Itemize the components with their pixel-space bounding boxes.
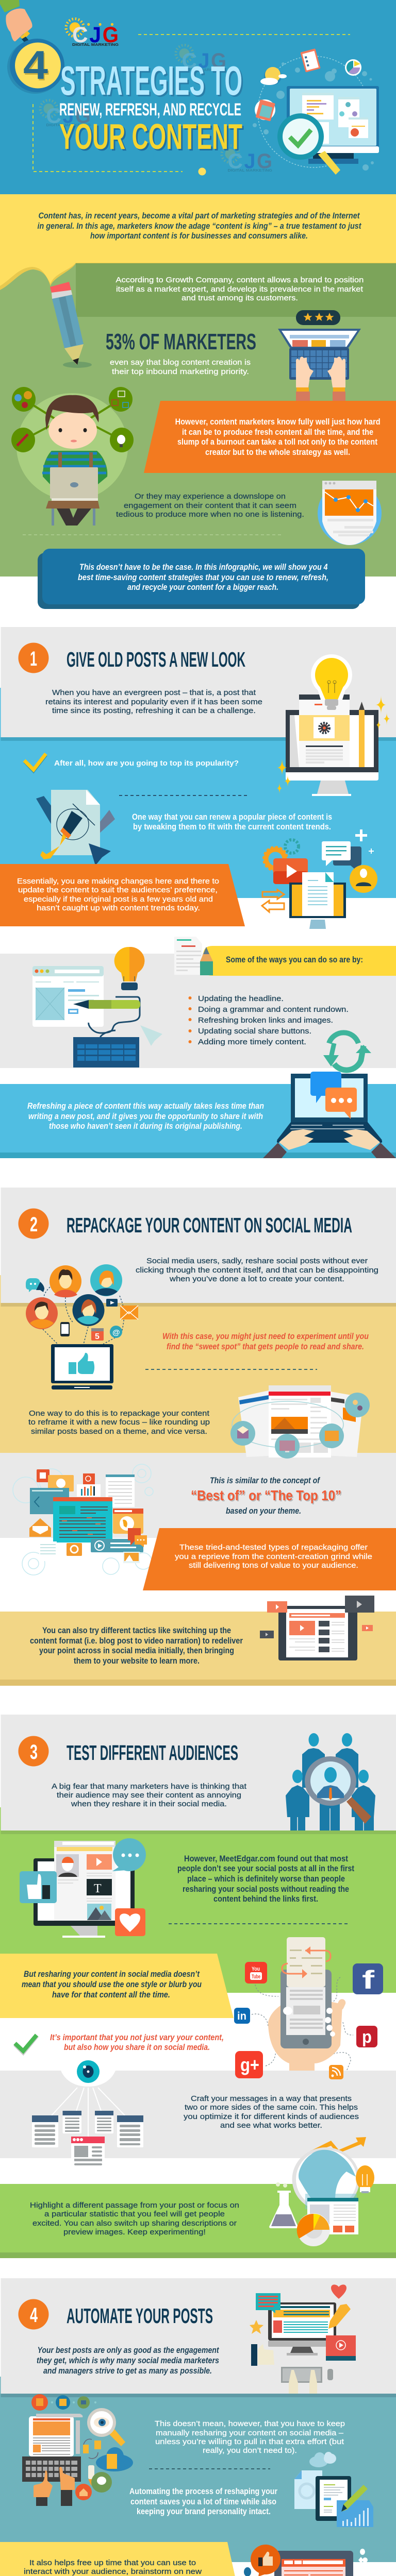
text block: manual resharing: [155, 2420, 345, 2455]
text block: intro paragraph: [37, 211, 362, 241]
text block: social media users: Social media users, sadly, reshare social posts without ever: [146, 1257, 368, 1265]
text block: highlight a passage: preview images. Keep experimenting!: [63, 2228, 206, 2236]
text block: engagement: [37, 2345, 220, 2376]
callout: this doesn't have to be the case: best time-saving content strategies that you can use to renew, refresh,: [78, 572, 328, 582]
callout: orange repackaging: still delivering tons of value to your audience.: [189, 1562, 358, 1570]
watermark: logo 2: J: [63, 104, 74, 128]
text block: social media users: clicking through the content itself, and that can be disappointing: [136, 1266, 378, 1275]
text block: best of: This is similar to the concept of: [210, 1476, 321, 1485]
text block: meetedgar: content behind the links first.: [213, 1894, 318, 1904]
illustration: browser bulb and pen: [32, 947, 162, 1067]
callout: ways ribbon with paper and pencil: Some of the ways you can do so are by:: [226, 955, 363, 964]
text block: highlight a passage: a particular statistic that you feel will get people: [44, 2210, 225, 2218]
callout: orange essentially: especially if the original post is a few years old and: [24, 895, 213, 904]
callout: yellow resharing: [0, 1954, 234, 2018]
illustration: phone in hand with social icons: [234, 1937, 383, 2079]
watermark: logo 2: C: [46, 104, 61, 128]
text block: craft your messages: you optimize it for different kinds of audiences: [184, 2113, 359, 2121]
text block: downslope: Or they may experience a downslope on: [135, 493, 286, 501]
text block: renew popular content: [132, 812, 332, 832]
text block: best of: [191, 1476, 342, 1516]
text block: meetedgar: However, MeetEdgar.com found out that most: [184, 1854, 348, 1863]
text block: best of: “Best of” or “The Top 10”: [191, 1487, 341, 1503]
watermark: logo 2: DIGITAL MARKETING: [46, 124, 91, 127]
text block: big fear: their audience may see their content as annoying: [57, 1791, 241, 1800]
text block: tactics: them to your website to learn more.: [74, 1656, 200, 1666]
icon: big number 4 in magnifier: 4: [23, 42, 48, 88]
callout: orange repackaging: you a reprieve from the content-creation grind while: [175, 1553, 372, 1561]
text block: growth company: itself as a market expert, and develop its prevalence in the market: [116, 285, 363, 294]
logo: CJG Digital Marketing header: DIGITAL MARKETING: [72, 42, 119, 47]
panel: section 1 gray tips band: [0, 954, 396, 1068]
heading: section 4: AUTOMATE YOUR POSTS: [67, 2304, 213, 2328]
illustration: web content collage: [13, 1464, 153, 1575]
illustration: declining line chart: [318, 481, 382, 545]
text block: craft your messages: and see what works better.: [220, 2122, 322, 2130]
illustration: audience under magnifier: [286, 1733, 375, 1831]
illustration: tablet with cloud and chart: [294, 2452, 373, 2527]
text block: social media users: [136, 1257, 378, 1283]
text block: downslope: engagement on their content that it can seem: [124, 502, 296, 510]
illustration: monitor with social content: T: [94, 1882, 102, 1895]
text block: meetedgar: place – which is definitely worse than people: [187, 1874, 345, 1884]
text block: reframe: One way to do this is to repackage your content: [29, 1410, 209, 1418]
illustration: eye watching web pages: [32, 2060, 143, 2166]
panel: section 1 closing blue band: [0, 1084, 396, 1158]
illustration: design document with pen tool: [36, 790, 115, 866]
callout: yellow resharing: have for that content all the time.: [52, 1990, 170, 1999]
text block: growth company: [116, 276, 364, 302]
callout: orange however: [144, 401, 396, 473]
text block: best of: based on your theme.: [226, 1506, 301, 1516]
text block: renew popular content: One way that you can renew a popular piece of content is: [132, 812, 332, 822]
panel: section 3 closing green band: [0, 2184, 396, 2258]
text block: manual resharing: This doesn’t mean, however, that you have to keep: [155, 2420, 345, 2428]
text block: evergreen post: time since its posting, refreshing it can be a challenge.: [52, 707, 256, 715]
callout: orange essentially: update the content to suit the audiences’ preference,: [18, 886, 218, 894]
illustration: phone in hand with social icons: p: [362, 2027, 372, 2047]
text block: tactics: content format (i.e. blog post to video narration) to redeliver: [30, 1636, 243, 1646]
text block: reframe: similar posts based on a theme, and vice versa.: [31, 1428, 207, 1436]
text block: meetedgar: people don’t see your social posts at all in the first: [177, 1863, 354, 1873]
logo: CJG Digital Marketing header: [66, 19, 119, 47]
illustration: news pages with icons: [230, 1385, 370, 1459]
decorative dashed divider: [119, 795, 249, 796]
stat: 53% of marketers: [106, 329, 256, 376]
callout: yellow free up time: [0, 2542, 241, 2576]
callout: orange however: creator but to the whole strategy as well.: [205, 447, 350, 457]
callout: this doesn't have to be the case: This doesn’t have to be the case. In this infographic, we will show you 4: [79, 562, 328, 572]
illustration: laptop with stars and hands: [278, 310, 361, 401]
text block: big fear: [52, 1783, 246, 1808]
heading: section 2: [19, 1209, 352, 1239]
text block: manual resharing: manually resharing your content on social media –: [156, 2429, 344, 2437]
text block: highlight a passage: Highlight a different passage from your post or focus on: [30, 2201, 239, 2210]
heading: section 3: TEST DIFFERENT AUDIENCES: [67, 1741, 238, 1765]
text block: refreshing takes less time: writing a new post, and it gives you the opportunity to share it with: [28, 1111, 263, 1121]
text block: highlight a passage: [30, 2201, 239, 2236]
illustration: content trends monitor: [262, 829, 377, 929]
text block: best of: “Best of” or “The Top 10”: [192, 1488, 342, 1504]
logo: CJG Digital Marketing header: J: [89, 23, 101, 47]
text block: growth company: and trust among its customers.: [182, 294, 298, 302]
illustration: monitor with social content: [20, 1838, 146, 1938]
text block: automating saves time: keeping your brand personality intact.: [137, 2506, 271, 2516]
callout: orange repackaging: [143, 1528, 396, 1590]
text block: evergreen post: When you have an evergreen post – that is, a post that: [52, 689, 256, 697]
illustration: social audience and laptop thumb: [26, 1264, 138, 1389]
text block: meetedgar: [177, 1854, 354, 1904]
icon: big number 4 in magnifier: 4: [24, 44, 49, 89]
text block: tactics: You can also try different tactics like switching up the: [42, 1625, 231, 1635]
callout: yellow free up time: interact with your audience, brainstorm on new: [24, 2568, 202, 2576]
illustration: phone in hand with social icons: g+: [240, 2054, 259, 2075]
callout: this doesn't have to be the case: and recycle your content for a bigger reach.: [127, 582, 278, 592]
heading: section 1: GIVE OLD POSTS A NEW LOOK: [67, 648, 245, 671]
text block: sweet spot: [162, 1331, 369, 1351]
callout: ways ribbon with paper and pencil: [174, 937, 396, 976]
illustration: social audience and laptop thumb: 5: [95, 1332, 100, 1341]
text block: highlight a passage: excited. You can also switch up sharing descriptions or: [32, 2219, 237, 2228]
watermark: logo 3: J: [244, 149, 256, 173]
text block: craft your messages: two or more sides of the same coin. This helps: [185, 2104, 358, 2112]
text block: engagement: and managers strive to get as many as possible.: [43, 2366, 212, 2376]
text block: craft your messages: [184, 2095, 359, 2130]
icon and text: after all: After all, how are you going to top its popularity?: [54, 759, 239, 768]
logo: CJG Digital Marketing header: C: [72, 23, 88, 47]
illustration: person with laptop and ideas: [11, 387, 134, 526]
watermark: logo 1: C: [182, 48, 197, 72]
text block: renew popular content: by tweaking them to fit with the current content trends.: [133, 822, 331, 832]
panel: section 4 background: [0, 2278, 396, 2576]
text block: reframe: [28, 1410, 210, 1436]
watermark: logo 1: J: [198, 48, 209, 72]
text block: social media users: when you’ve done a lot to create your content.: [169, 1275, 344, 1283]
illustration: monitor with social automation: [250, 2284, 356, 2394]
list: ways to refresh: [189, 995, 349, 1046]
title: RENEW, REFRESH, AND RECYCLE: [59, 100, 241, 120]
heading: section 4: 4: [30, 2304, 38, 2327]
panel: section 2 background: [0, 1188, 396, 1538]
callout: orange essentially: Essentially, you are making changes here and there to: [17, 877, 219, 886]
text block: growth company: According to Growth Company, content allows a brand to position: [116, 276, 364, 284]
title: YOUR CONTENT: [59, 116, 242, 157]
text block: evergreen post: [45, 689, 262, 715]
heading: section 1: [19, 643, 245, 673]
text block: automating saves time: Automating the process of reshaping your: [129, 2486, 277, 2496]
icon and text: vary your content: [15, 2032, 224, 2053]
icon and text: vary your content: It’s important that you not just vary your content,: [50, 2032, 224, 2042]
stat: 53% of marketers: 53% OF MARKETERS: [106, 329, 256, 354]
text block: refreshing takes less time: Refreshing a piece of content this way actually takes less time than: [27, 1101, 264, 1111]
list: ways to refresh: Doing a grammar and content rundown.: [198, 1006, 349, 1014]
watermark: logo 1: [176, 45, 227, 72]
heading: section 1: 1: [30, 648, 37, 670]
watermark: logo 1: DIGITAL MARKETING: [182, 69, 227, 72]
illustration: laptop with recycle arrows and chat: [263, 1032, 396, 1158]
illustration: monitor with light bulb: [277, 654, 390, 796]
title: STRATEGIES TO: [60, 58, 242, 104]
callout: yellow resharing: But resharing your content in social media doesn’t: [24, 1969, 200, 1979]
illustration: tablet with videos: [260, 1596, 374, 1660]
watermark: logo 3: [222, 145, 273, 173]
panel: intro yellow band: [0, 194, 396, 263]
watermark: logo 3: C: [228, 149, 243, 173]
list: ways to refresh: Updating social share buttons.: [198, 1027, 311, 1036]
illustration: man presenting at laptop: [236, 2545, 376, 2576]
stat: 53% of marketers: their top inbound marketing priority.: [112, 368, 249, 376]
watermark: logo 3: DIGITAL MARKETING: [228, 169, 273, 173]
illustration: pencil: [50, 282, 92, 368]
heading: section 2: 2: [30, 1213, 38, 1236]
text block: craft your messages: Craft your messages in a way that presents: [191, 2095, 352, 2103]
illustration: phone in hand with social icons: f: [362, 1965, 374, 1994]
text block: intro paragraph: how important content is for businesses and consumers alike.: [90, 231, 308, 241]
list: ways to refresh: Adding more timely content.: [198, 1038, 306, 1046]
panel: section 2 closing tan band: [0, 1612, 396, 1686]
decorative dashed header lines and dot: [33, 35, 350, 175]
title: YOUR CONTENT: [61, 118, 244, 158]
illustration: monitor with checkmark magnifier and icons: [253, 48, 379, 175]
text block: big fear: when they reshare it in their social media.: [71, 1800, 227, 1808]
list: ways to refresh: Refreshing broken links and images.: [198, 1016, 333, 1025]
text block: evergreen post: retains its interest and popularity even if it has been some: [45, 698, 262, 706]
watermark: logo 3: G: [257, 149, 272, 173]
callout: orange repackaging: These tried-and-tested types of repackaging offer: [179, 1544, 368, 1552]
illustration: phone in hand with social icons: Tube: [252, 1974, 260, 1980]
text block: sweet spot: find the “sweet spot” that gets people to read and share.: [167, 1342, 364, 1351]
illustration: analytics workflow and keyboard: [22, 2394, 133, 2506]
panel: header background: [0, 0, 396, 194]
text block: refreshing takes less time: [27, 1101, 264, 1131]
text block: downslope: tedious to produce more when no one is listening.: [116, 511, 304, 519]
text block: automating saves time: content saves you a lot of time while also: [130, 2497, 276, 2506]
text block: manual resharing: unless you’re willing to pull in that extra effort (but: [155, 2438, 344, 2446]
illustration: phone in hand with social icons: You: [252, 1966, 260, 1972]
icon and text: after all: [24, 754, 239, 771]
text block: tactics: [30, 1625, 243, 1666]
callout: yellow free up time: It also helps free up time that you can use to: [29, 2559, 196, 2567]
title: STRATEGIES TO: [62, 59, 244, 105]
callout: orange essentially: hasn’t caught up with content trends today.: [37, 904, 200, 912]
illustration: phone in hand with social icons: in: [237, 2010, 246, 2022]
title: [59, 58, 244, 158]
watermark: logo 2: G: [75, 104, 91, 128]
text block: engagement: they get, which is why many social media marketers: [37, 2355, 219, 2365]
text block: reframe: to reframe it with a new focus – like rounding up: [28, 1418, 210, 1427]
callout: this doesn't have to be the case: [38, 549, 365, 609]
icon: big number 4 in magnifier: [7, 39, 64, 94]
illustration: globe with flask and chart: [269, 2137, 374, 2246]
watermark: logo 2: [40, 100, 91, 128]
stat: 53% of marketers: even say that blog content creation is: [110, 359, 251, 367]
text block: meetedgar: resharing your social posts without reading the: [183, 1884, 349, 1894]
text block: downslope: [116, 493, 304, 519]
text block: engagement: Your best posts are only as good as the engagement: [37, 2345, 220, 2355]
text block: big fear: A big fear that many marketers have is thinking that: [52, 1783, 246, 1791]
decorative hand holding magnifier: [0, 0, 32, 43]
heading: section 3: [19, 1736, 238, 1766]
panel: section 1 blue background: [0, 627, 396, 898]
heading: section 3: 3: [30, 1741, 38, 1764]
text block: refreshing takes less time: those who haven’t seen it during its original publishing.: [49, 1121, 242, 1131]
callout: orange essentially: [0, 864, 245, 926]
heading: section 4: [19, 2299, 213, 2330]
text block: manual resharing: really, you don’t need to).: [203, 2447, 297, 2455]
text block: tactics: your point across in social media initially, then bringing: [39, 1646, 234, 1655]
list: ways to refresh: Updating the headline.: [198, 995, 284, 1003]
callout: yellow resharing: mean that you should use the one style or blurb you: [22, 1979, 202, 1989]
illustration: social audience and laptop thumb: @: [112, 1328, 120, 1337]
text block: automating saves time: [129, 2486, 277, 2516]
watermark: logo 1: G: [211, 48, 226, 72]
panel: intro green band: [0, 260, 396, 577]
icon and text: vary your content: but also how you share it on social media.: [64, 2042, 210, 2052]
panel: section 3 background: [0, 1715, 396, 2158]
logo: CJG Digital Marketing header: G: [103, 23, 119, 47]
